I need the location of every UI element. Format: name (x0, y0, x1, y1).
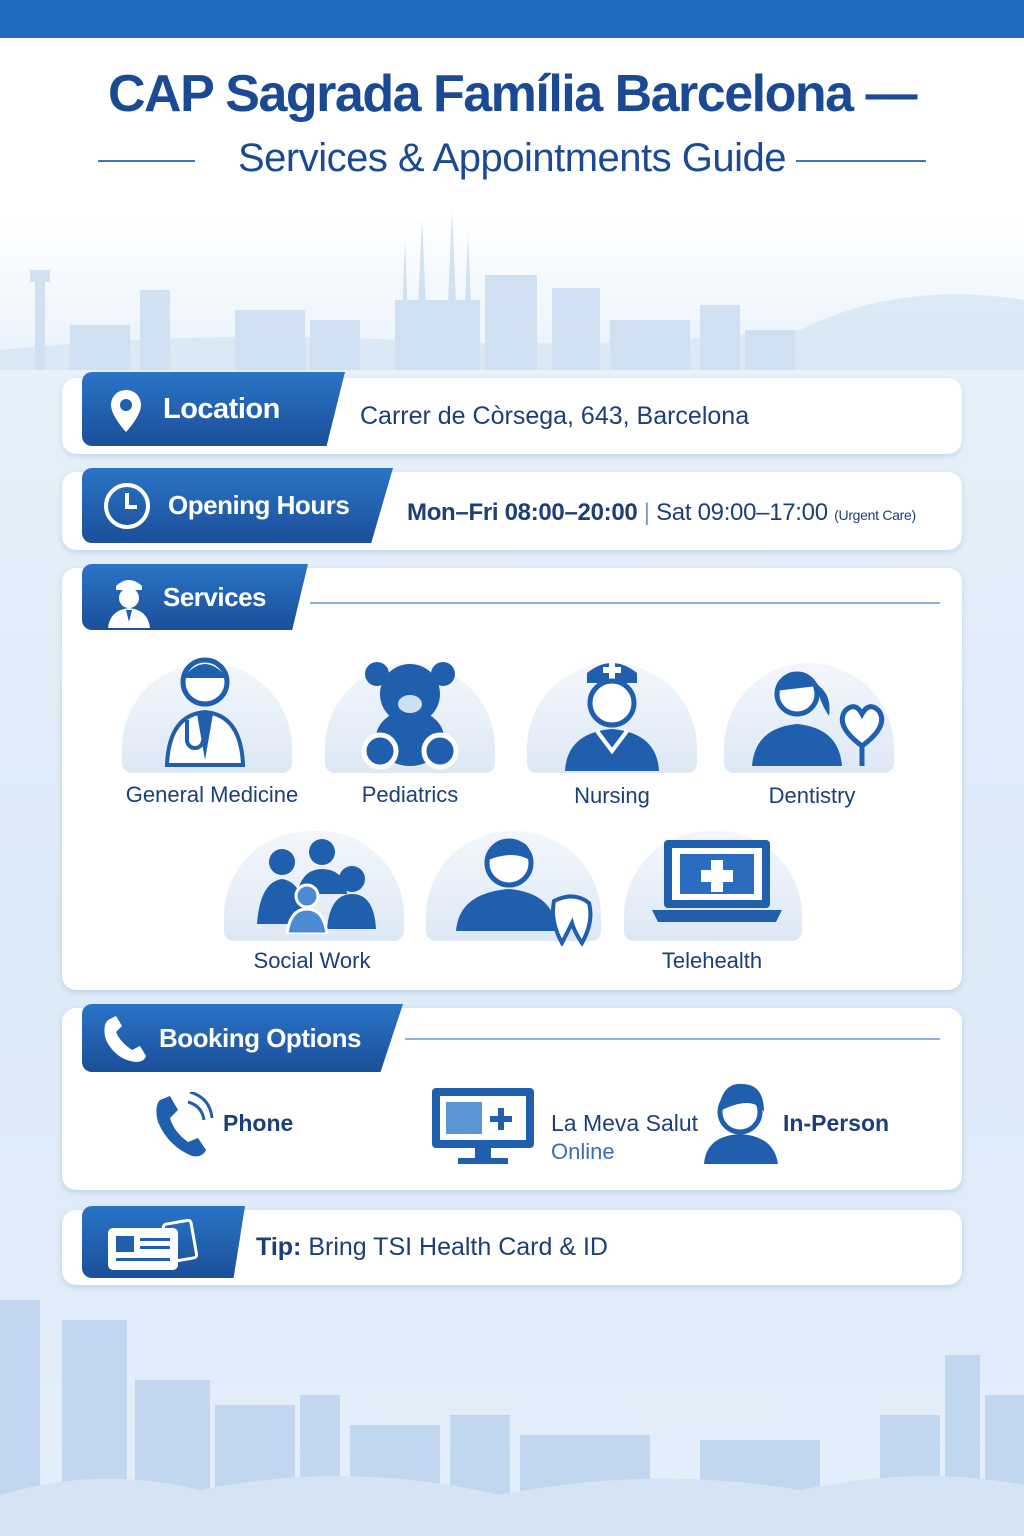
tab: opening hours (82, 468, 393, 543)
panel: tip (62, 1210, 962, 1285)
tab: services: Services (163, 582, 266, 612)
skyline top (0, 212, 1024, 370)
service: social work: Social Work (254, 948, 370, 973)
booking: la meva salut: Online (551, 1139, 615, 1164)
service: pediatrics (325, 662, 495, 807)
panel: location (62, 378, 962, 454)
tab: booking options: Booking Options (159, 1022, 361, 1052)
tab: location (82, 372, 345, 446)
service: general medicine: General Medicine (126, 782, 298, 807)
panel: opening hours: Mon–Fri 08:00–20:00 | Sat 09:00–17:00 (Urgent Care) (407, 499, 916, 526)
service: telehealth: Telehealth (662, 948, 762, 973)
service: dental patient (426, 831, 601, 946)
booking: la meva salut (432, 1088, 698, 1164)
tab: tip (82, 1206, 245, 1278)
booking: phone: Phone (223, 1110, 293, 1136)
service: telehealth (624, 831, 802, 973)
tab: booking options (82, 1004, 403, 1072)
service: pediatrics: Pediatrics (362, 782, 458, 807)
skyline bottom (0, 1300, 1024, 1536)
service: general medicine (122, 658, 298, 807)
tab: opening hours: Opening Hours (168, 490, 349, 520)
tab: location: Location (163, 392, 280, 424)
service: dentistry (724, 663, 894, 808)
service: nursing: Nursing (574, 783, 650, 808)
subtitle: Services & Appointments Guide (238, 136, 786, 180)
booking: in-person: In-Person (783, 1110, 889, 1136)
panel: opening hours (62, 472, 962, 550)
booking: phone (156, 1092, 293, 1156)
title: CAP Sagrada Família Barcelona — (108, 65, 916, 123)
service: social work (224, 831, 404, 973)
top bar (0, 0, 1024, 38)
tab: services (82, 564, 308, 630)
panel: booking options (62, 1008, 962, 1190)
booking: la meva salut: La Meva Salut (551, 1110, 698, 1136)
panel: location: Carrer de Còrsega, 643, Barcelona (360, 402, 749, 430)
panel: services (62, 568, 962, 990)
service: dentistry: Dentistry (769, 783, 855, 808)
service: nursing (527, 663, 697, 808)
booking: in-person (704, 1084, 889, 1164)
panel: tip: Tip: Bring TSI Health Card & ID (256, 1233, 608, 1261)
